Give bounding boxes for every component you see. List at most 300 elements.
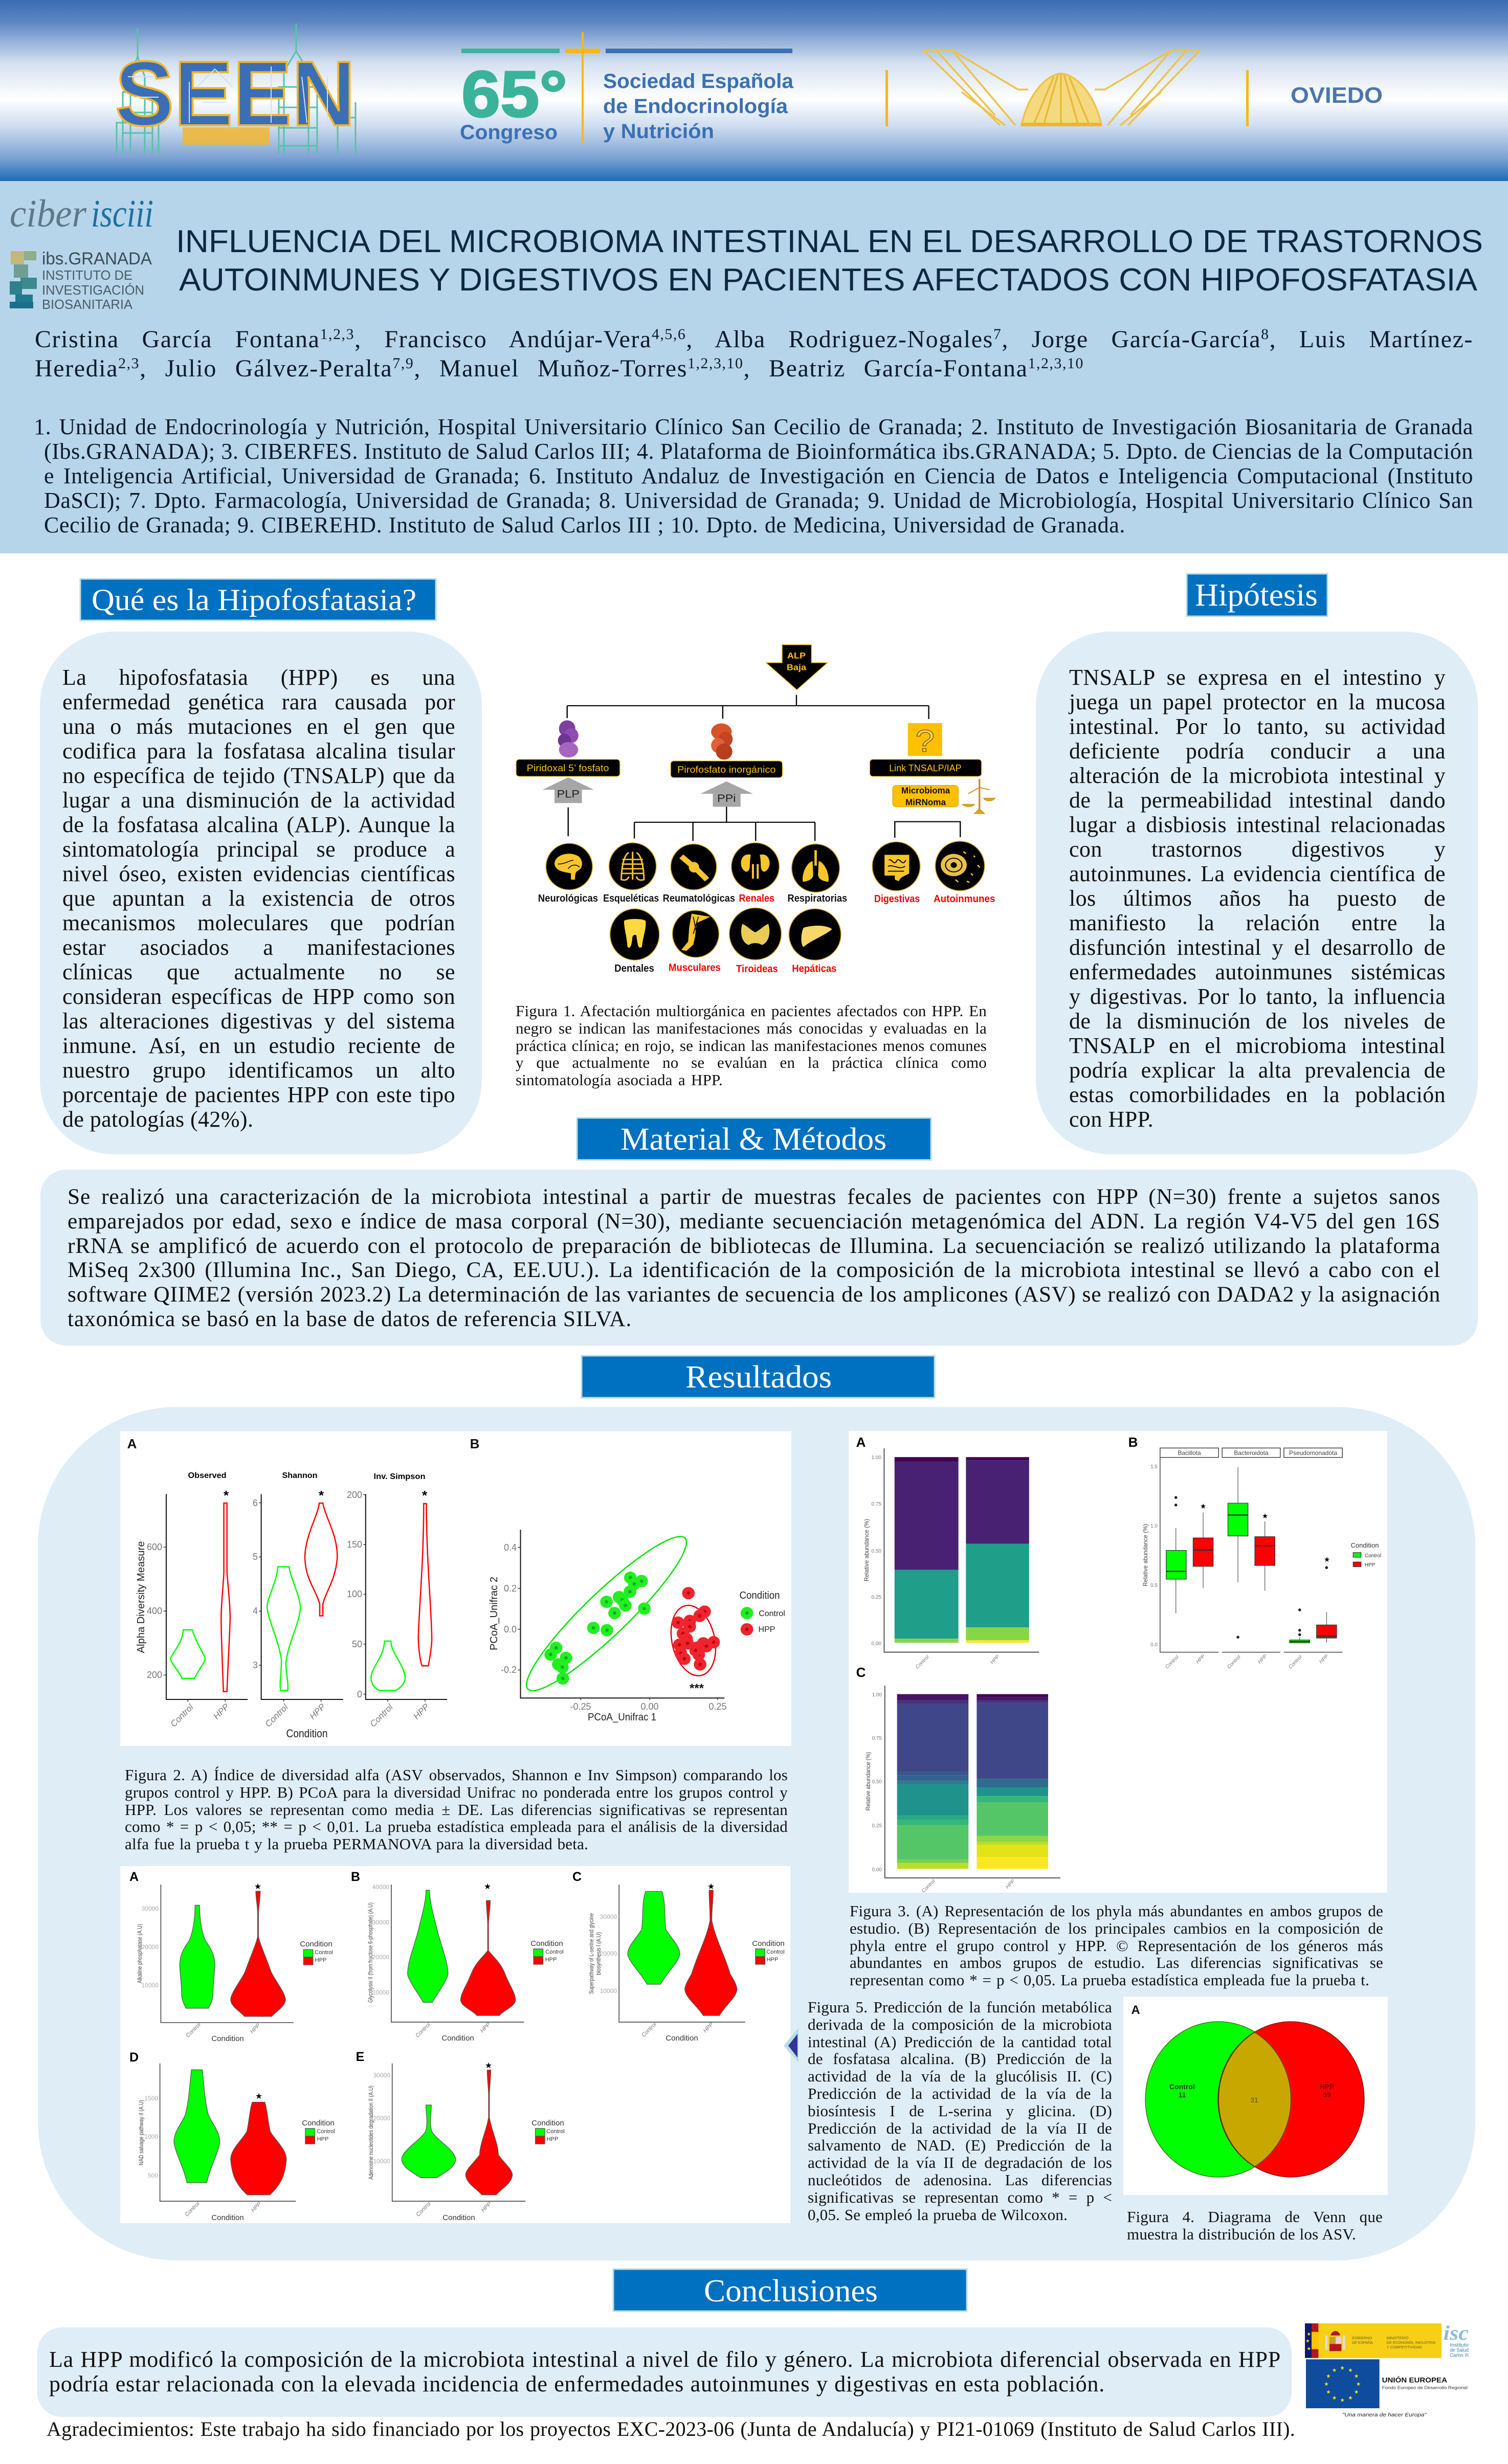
- caption: figure 5: actividad de la vía de la glucólisis II. (C): [808, 2067, 1112, 2085]
- caption: figure 5: biosíntesis I de L-serina y glicina. (D): [808, 2102, 1112, 2120]
- chart: phyla boxplots: Control: [1365, 1553, 1381, 1559]
- significance stars: [254, 1883, 715, 2101]
- panel letters: E: [356, 2050, 364, 2064]
- chart: PCoA scatter: Condition: [740, 1590, 780, 1601]
- x tick labels: Control: [185, 2022, 202, 2039]
- text: Qué es la Hipofosfatasia: nivel óseo, existen evidencias científicas: [62, 861, 455, 886]
- text: Hipótesis: manifiesto la relación entre la: [1069, 910, 1446, 935]
- affiliations: (Ibs.GRANADA); 3. CIBERFES. Instituto de Salud Carlos III; 4. Plataforma de Bioinformática ibs.GRANADA; 5. Dpto. de Ciencias de la Computación: [44, 439, 1473, 464]
- text: Conclusiones: La HPP modificó la composición de la microbiota intestinal a nivel de filo y género. La microbiota diferencial observada en HPP: [49, 2347, 1281, 2372]
- chart: phyla stacked bars: [856, 1435, 1039, 1670]
- panel letters: C: [572, 1870, 582, 1884]
- chart: genera stacked bars: Relative abundance (%): [864, 1752, 872, 1810]
- label: Microbioma MiRNoma: Microbioma: [901, 785, 950, 795]
- figure 4: Venn diagram: [1123, 1997, 1388, 2195]
- caption: figure 4: Figura 4. Diagrama de Venn que: [1127, 2208, 1383, 2226]
- chart: violins alpha diversity: 100: [347, 1589, 362, 1599]
- chart: phyla boxplots: 1.5: [1150, 1464, 1158, 1470]
- chart: violins alpha diversity: Shannon: [282, 1471, 317, 1480]
- x tick labels: HPP: [702, 2021, 715, 2034]
- text: Hipótesis: estas comorbilidades en la población: [1069, 1082, 1446, 1107]
- text: Hipótesis: enfermedades autoinmunes sistémicas: [1069, 959, 1446, 984]
- text: Qué es la Hipofosfatasia: [62, 665, 455, 1132]
- axis tick labels: 1500: [144, 2095, 158, 2102]
- chart: violins alpha diversity: 200: [347, 1490, 362, 1500]
- text: Hipótesis: lugar a disbiosis intestinal relacionadas: [1069, 812, 1446, 837]
- logo: ibs.GRANADA: INVESTIGACIÓN: [42, 282, 144, 298]
- arrow: ALP baja: ALP: [787, 651, 806, 660]
- text: Qué es la Hipofosfatasia: que apuntan a la existencia de otros: [62, 886, 455, 911]
- organ labels: Hepáticas: [792, 963, 836, 974]
- x axis titles: Condition: [211, 2213, 244, 2222]
- logo: Gobierno de España: ★: [1306, 2332, 1311, 2337]
- text: Hipótesis: de la permeabilidad intestinal dando: [1069, 788, 1446, 813]
- legends: Control: [317, 2129, 335, 2135]
- legends: HPP: [767, 1957, 778, 1963]
- text: Material y Métodos: MiSeq 2x300 (Illumina Inc., San Diego, CA, EE.UU.). La identificación de la composición de la microbiota intestinal se llevó a cabo con el: [68, 1258, 1440, 1282]
- axis tick labels: 20000: [600, 1950, 617, 1957]
- text: Hipótesis: y digestivas. Por lo tanto, la influencia: [1069, 984, 1446, 1009]
- legends: [300, 1939, 785, 2142]
- axis tick labels: 30000: [142, 1905, 159, 1912]
- chart: phyla boxplots: Relative abundance (%): [1142, 1524, 1149, 1586]
- logo: Unión Europea: ★: [1348, 2395, 1353, 2401]
- logo: Gobierno de España: DE ESPAÑA: [1352, 2340, 1373, 2345]
- x tick labels: Control: [640, 2021, 658, 2039]
- chart: phyla boxplots: HPP: [1318, 1653, 1330, 1665]
- panel letters: A: [129, 1870, 139, 1884]
- arrow: pointing to figure 5: [784, 2028, 799, 2063]
- text: Hipótesis: alteración de la microbiota intestinal y: [1069, 763, 1446, 788]
- logo: Unión Europea: ★: [1326, 2389, 1331, 2395]
- logo: Gobierno de España: ★: [1305, 2338, 1310, 2343]
- arrow: PLP: [542, 777, 594, 803]
- heading: Resultados: [582, 1356, 935, 1398]
- chart: violins alpha diversity: 4: [253, 1606, 258, 1616]
- legends: HPP: [545, 1957, 557, 1963]
- caption: figure 5: actividad de la vía II de degradación de los: [808, 2154, 1112, 2171]
- caption: figure 3: estudio. (B) Representación de los principales cambios en la composición de: [850, 1919, 1383, 1937]
- molecule: piridoxal: [558, 720, 579, 757]
- affiliations: Cecilio de Granada; 9. CIBEREHD. Instituto de Salud Carlos III ; 10. Dpto. de Medicina, Universidad de Granada.: [44, 512, 1125, 537]
- figure 4: Venn diagram: A: [1131, 2003, 1140, 2017]
- chart: phyla stacked bars: Control: [915, 1654, 930, 1670]
- chart: phyla stacked bars: 0.50: [872, 1549, 881, 1554]
- heading: Hipótesis: [1187, 574, 1327, 616]
- y axis titles: biosynthesis I (A.U): [595, 1932, 602, 1975]
- text: Material y Métodos: [68, 1184, 1440, 1331]
- significance stars: ★: [254, 1883, 261, 1891]
- panel: Resultados: [38, 1407, 1475, 2260]
- caption: figure 5: derivada de la composición de la microbiota: [808, 2015, 1112, 2033]
- heading: Qué es la Hipofosfatasia: Qué es la Hipofosfatasia?: [92, 583, 416, 617]
- legends: HPP: [547, 2136, 558, 2142]
- label: Link: Link TNSALP/IAP: [889, 763, 962, 774]
- logo: 65 congreso SEEN: Sociedad Española: [603, 70, 794, 93]
- caption: figure 2: alfa fue la prueba t y la prueba PERMANOVA para la diversidad beta.: [125, 1835, 588, 1853]
- caption: figure 2: [125, 1766, 788, 1853]
- x tick labels: HPP: [480, 2201, 493, 2213]
- chart: genera stacked bars: 0.25: [872, 1823, 882, 1829]
- logo: Unión Europea: UNIÓN EUROPEA: [1382, 2375, 1447, 2384]
- chart: violins alpha diversity: A: [127, 1436, 137, 1451]
- axis tick labels: 500: [148, 2172, 158, 2179]
- chart: genera stacked bars: 0.50: [872, 1779, 882, 1785]
- logo: Instituto de Salud Carlos III: Instituto: [1450, 2342, 1469, 2348]
- text: Material y Métodos: Se realizó una caracterización de la microbiota intestinal a partir de muestras fecales de pacientes con HPP (N=30) frente a sujetos sanos: [68, 1184, 1440, 1209]
- logo: Unión Europea: ★: [1354, 2373, 1359, 2379]
- legends: Control: [545, 1949, 564, 1955]
- x axis titles: [211, 2034, 698, 2222]
- title: AUTOINMUNES Y DIGESTIVOS EN PACIENTES AFECTADOS CON HIPOFOSFATASIA: [179, 262, 1478, 298]
- axis tick labels: 20000: [372, 1954, 389, 1961]
- chart: phyla boxplots: Control: [1226, 1654, 1242, 1670]
- text: Hipótesis: de la disminución de los niveles de: [1069, 1009, 1446, 1034]
- affiliations: [34, 414, 1473, 537]
- chart: phyla boxplots: HPP: [1257, 1653, 1269, 1665]
- label: Microbioma MiRNoma: [893, 785, 958, 807]
- chart: phyla boxplots: 1.0: [1150, 1524, 1158, 1529]
- arrow: PPi: [700, 781, 753, 807]
- logo: 65 congreso SEEN: Congreso: [460, 121, 558, 144]
- molecule: pirofosfato: [711, 724, 733, 759]
- arrow: ALP baja: [766, 645, 828, 690]
- affiliations: 1. Unidad de Endocrinología y Nutrición, Hospital Universitario Clínico San Cecilio de Granada; 2. Instituto de Investigación Biosanitaria de Granada: [34, 414, 1473, 439]
- caption: figure 1: sintomatología asociada a HPP.: [516, 1071, 723, 1089]
- logo: Gobierno de España: GOBIERNO: [1352, 2336, 1372, 2340]
- caption: figure 1: práctica clínica; en rojo, se indican las manifestaciones menos comunes: [516, 1037, 987, 1055]
- text: Material y Métodos: taxonómica se basó en la base de datos de referencia SILVA.: [68, 1307, 632, 1331]
- chart: phyla boxplots: [1128, 1435, 1381, 1670]
- chart: PCoA scatter: PCoA_Unifrac 1: [588, 1712, 656, 1723]
- chart: PCoA scatter: [470, 1436, 785, 1723]
- logo: Instituto de Salud Carlos III: [1444, 2321, 1469, 2359]
- text: Hipótesis: intestinal. Por lo tanto, su actividad: [1069, 714, 1446, 739]
- legends: Condition: [530, 1939, 563, 1948]
- organ labels: Neurológicas: [538, 893, 598, 904]
- text: Qué es la Hipofosfatasia: porcentaje de pacientes HPP con este tipo: [62, 1082, 455, 1107]
- icon: question mark: [908, 723, 942, 758]
- logo: Instituto de Salud Carlos III: Carlos III: [1450, 2353, 1469, 2359]
- chart: PCoA scatter: -0.2: [501, 1665, 517, 1675]
- text: Qué es la Hipofosfatasia: una o más mutaciones en el gen que: [62, 714, 455, 739]
- chart: violins alpha diversity: HPP: [412, 1701, 431, 1721]
- figure 4: Venn diagram: Control: [1169, 2082, 1195, 2091]
- y axis titles: Glycolysis II (from fructose 6-phosphate) (A.U): [367, 1902, 374, 2003]
- axis tick labels: 10000: [600, 1987, 617, 1995]
- chart: genera stacked bars: C: [856, 1665, 866, 1680]
- organ labels: Digestivas: [874, 893, 920, 905]
- chart: violins alpha diversity: Condition: [286, 1727, 327, 1740]
- chart: phyla stacked bars: 0.00: [872, 1641, 881, 1647]
- text: Material y Métodos: emparejados por edad, sexo e índice de masa corporal (N=30), mediante secuenciación metagenómica del ADN. La región V4-V5 del gen 16S: [68, 1209, 1440, 1234]
- caption: figure 2: grupos control y HPP. B) PCoA para la diversidad Unifrac no ponderada entre los grupos control y: [125, 1783, 788, 1801]
- text: Qué es la Hipofosfatasia: enfermedad genética rara causada por: [62, 689, 455, 714]
- organ labels: Respiratorias: [788, 893, 847, 904]
- chart: PCoA scatter: B: [470, 1436, 479, 1451]
- chart: violins alpha diversity: [127, 1436, 447, 1740]
- figure 2: alpha and beta diversity: [120, 1431, 791, 1746]
- heading: Conclusiones: Conclusiones: [704, 2274, 878, 2309]
- x tick labels: HPP: [250, 2201, 263, 2213]
- text: Qué es la Hipofosfatasia: estar asociados a manifestaciones: [62, 935, 455, 960]
- text: Qué es la Hipofosfatasia: clínicas que actualmente no se: [62, 959, 455, 984]
- panel: Qué es la Hipofosfatasia: [40, 632, 482, 1154]
- title: INFLUENCIA DEL MICROBIOMA INTESTINAL EN EL DESARROLLO DE TRASTORNOS: [176, 224, 1483, 259]
- chart: violins alpha diversity: Inv. Simpson: [373, 1472, 426, 1481]
- caption: figure 5: significativas se representan como * = p <: [808, 2188, 1112, 2206]
- text: Hipótesis: TNSALP se expresa en el intestino y: [1069, 665, 1446, 690]
- label: Pirofosfato: [671, 761, 783, 778]
- chart: violins alpha diversity: 400: [147, 1606, 162, 1616]
- caption: figure 5: Predicción de la actividad de la vía de la: [808, 2085, 1112, 2102]
- figure 4: Venn diagram: 31: [1250, 2096, 1258, 2104]
- organ labels: Reumatológicas: [663, 893, 735, 904]
- chart: phyla boxplots: Condition: [1351, 1541, 1379, 1549]
- chart: violins alpha diversity: Control: [368, 1702, 395, 1729]
- caption: figure 4: muestra la distribución de los ASV.: [1127, 2225, 1356, 2243]
- logo: 65 congreso SEEN: y Nutrición: [603, 120, 714, 143]
- axis tick labels: 10000: [142, 1982, 159, 1989]
- organ labels: Autoinmunes: [934, 893, 995, 905]
- chart: phyla boxplots: ★: [1200, 1502, 1206, 1510]
- caption: figure 3: [850, 1902, 1383, 1989]
- figure 4: Venn diagram: 39: [1323, 2091, 1331, 2099]
- significance stars: ★: [485, 2062, 492, 2070]
- violin shapes and axes: [160, 1885, 765, 2201]
- y axis titles: NAD salvage pathway II (A.U): [138, 2100, 145, 2165]
- caption: figure 5: nucleótidos de adenosina. Las diferencias: [808, 2171, 1112, 2189]
- y axis titles: Alkaline phosphatase (A.U): [136, 1924, 143, 1983]
- significance stars: ★: [707, 1883, 715, 1891]
- logo: Unión Europea: "Una manera de hacer Europa": [1342, 2412, 1427, 2418]
- caption: figure 2: como * = p < 0,05; ** = p < 0,01. La prueba estadística empleada para el análisis de la diversidad: [125, 1818, 788, 1835]
- chart: PCoA scatter: Control: [759, 1609, 785, 1618]
- figure 4: Venn diagram: HPP: [1320, 2082, 1334, 2091]
- axis tick labels: 30000: [600, 1913, 617, 1920]
- chart: phyla boxplots: HPP: [1365, 1562, 1376, 1568]
- caption: figure 5: salvamento de NAD. (E) Predicción de la: [808, 2136, 1112, 2154]
- chart: violins alpha diversity: 3: [253, 1660, 258, 1670]
- text: Hipótesis: disfunción intestinal y el desarrollo de: [1069, 935, 1446, 960]
- chart: phyla boxplots: Control: [1288, 1654, 1303, 1670]
- axis tick labels: 30000: [373, 2072, 390, 2079]
- chart: phyla boxplots: 0.0: [1150, 1642, 1158, 1648]
- arrow: ALP baja: Baja: [787, 662, 806, 672]
- logo: Unión Europea: ★: [1356, 2381, 1361, 2387]
- caption: figure 5: de fosfatasa alcalina. (B) Predicción de la: [808, 2050, 1112, 2068]
- chart: phyla stacked bars: Relative abundance (%): [863, 1519, 870, 1581]
- logo: Gobierno de España: Y COMPETITIVIDAD: [1387, 2345, 1422, 2349]
- text: Qué es la Hipofosfatasia: lugar a una disminución de la actividad: [62, 788, 455, 813]
- heading: Resultados: Resultados: [685, 1360, 832, 1395]
- axis tick labels: 30000: [372, 1919, 389, 1926]
- text: Hipótesis: podría explicar la alta prevalencia de: [1069, 1058, 1446, 1083]
- chart: PCoA scatter: PCoA_Unifrac 2: [489, 1577, 500, 1650]
- text: Qué es la Hipofosfatasia: consideran específicas de HPP como son: [62, 984, 455, 1009]
- caption: figure 5: intestinal (A) Predicción de la cantidad total: [808, 2033, 1112, 2051]
- organ: Neurológicas: [546, 843, 592, 890]
- text: Hipótesis: con trastornos digestivos y: [1069, 837, 1446, 862]
- x tick labels: Control: [414, 2022, 432, 2039]
- text: Material y Métodos: software QIIME2 (versión 2023.2) La determinación de las variantes de secuencia de los amplicones (ASV) se realizó con DADA2 y la asignación: [68, 1282, 1440, 1307]
- legends: Control: [315, 1950, 333, 1956]
- chart: phyla boxplots: Bacillota: [1178, 1449, 1201, 1457]
- authors: Cristina García Fontana1,2,3, Francisco Andújar-Vera4,5,6, Alba Rodriguez-Nogales7, Jorge García-García8, Luis Martínez-: [35, 326, 1473, 353]
- x axis titles: Condition: [442, 2213, 475, 2222]
- icon: question mark: ?: [916, 724, 935, 758]
- chart: phyla stacked bars: HPP: [989, 1654, 1001, 1666]
- panel letters: B: [351, 1870, 360, 1884]
- text: Hipótesis: autoinmunes. La evidencia científica de: [1069, 861, 1446, 886]
- axis tick labels: 10000: [373, 2158, 390, 2165]
- x axis titles: Condition: [441, 2034, 474, 2043]
- chart: genera stacked bars: [856, 1665, 1060, 1894]
- text: Conclusiones: podría estar relacionada con la elevada incidencia de enfermedades autoinmunes y digestivas en esta población.: [49, 2371, 1105, 2396]
- chart: violins alpha diversity: Control: [263, 1702, 291, 1729]
- text: Qué es la Hipofosfatasia: de patologías (42%).: [62, 1107, 253, 1132]
- heading: Hipótesis: Hipótesis: [1195, 578, 1318, 613]
- text: Qué es la Hipofosfatasia: mecanismos moleculares que podrían: [62, 910, 455, 935]
- caption: figure 2: Figura 2. A) Índice de diversidad alfa (ASV observados, Shannon e Inv Simpson) comparando los: [125, 1766, 788, 1784]
- axis tick labels: 40000: [372, 1884, 389, 1891]
- chart: phyla boxplots: Bacteroidota: [1234, 1449, 1269, 1457]
- caption: figure 3: representan como * = p < 0,05. La prueba estadística empleada fue la prueba t.: [850, 1971, 1369, 1989]
- arrow: PLP: PLP: [557, 788, 580, 800]
- figure 5: metabolic function violins: [120, 1866, 790, 2223]
- text: Hipótesis: [1068, 665, 1446, 1132]
- logo: Unión Europea: ★: [1324, 2381, 1329, 2387]
- text: Qué es la Hipofosfatasia: de la fosfatasa alcalina (ALP). Aunque la: [62, 812, 455, 837]
- x tick labels: Control: [415, 2201, 432, 2218]
- logo: Unión Europea: ★: [1354, 2389, 1359, 2395]
- legends: Condition: [531, 2119, 564, 2127]
- chart: phyla stacked bars: A: [856, 1435, 866, 1450]
- chart: phyla boxplots: ★: [1324, 1555, 1330, 1563]
- axis tick labels: 20000: [142, 1943, 159, 1951]
- label: Microbioma MiRNoma: MiRNoma: [905, 797, 946, 807]
- caption: figure 1: negro se indican las manifestaciones más conocidas y evaluadas en la: [516, 1019, 987, 1037]
- legends: Condition: [752, 1939, 785, 1948]
- legends: Condition: [302, 2119, 335, 2127]
- chart: violins alpha diversity: 0: [357, 1689, 362, 1699]
- heading: Material & Métodos: [577, 1118, 931, 1160]
- chart: violins alpha diversity: Control: [169, 1702, 196, 1729]
- organ: Renales: [731, 843, 779, 890]
- x axis titles: Condition: [211, 2034, 244, 2043]
- caption: figure 5: Predicción de la actividad de la vía II de: [808, 2119, 1112, 2137]
- funding logos: [1305, 2321, 1469, 2418]
- logo: Unión Europea: [1306, 2359, 1468, 2418]
- heading: Material & Métodos: Material & Métodos: [620, 1122, 886, 1157]
- panel: Hipótesis: [1036, 632, 1478, 1154]
- organ: Digestivas: [872, 842, 920, 891]
- panel: Conclusiones: [37, 2327, 1292, 2417]
- text: Conclusiones: [49, 2347, 1281, 2396]
- chart: phyla boxplots: Pseudomonadota: [1289, 1449, 1337, 1457]
- text: Material y Métodos: rRNA se amplificó de acuerdo con el protocolo de preparación de bibliotecas de Illumina. La secuenciación se realizó utilizando la plataforma: [68, 1234, 1440, 1258]
- axis tick labels: 10000: [372, 1989, 389, 1996]
- title: [176, 224, 1483, 298]
- x tick labels: HPP: [479, 2021, 492, 2034]
- caption: figure 5: 0,05. Se empleó la prueba de Wilcoxon.: [808, 2206, 1068, 2224]
- chart: phyla stacked bars: 0.25: [872, 1595, 881, 1600]
- caption: figure 4: [1127, 2208, 1383, 2243]
- logo: Unión Europea: ★: [1332, 2367, 1337, 2373]
- logo: Gobierno de España: [1305, 2323, 1442, 2358]
- figure 3: taxonomic composition: [849, 1431, 1387, 1894]
- chart: violins alpha diversity: 5: [253, 1552, 258, 1562]
- title band: [0, 181, 1508, 553]
- x tick labels: [184, 2021, 715, 2218]
- x axis titles: Condition: [666, 2034, 698, 2043]
- icon: scales: [962, 779, 995, 814]
- logo: 65 congreso SEEN: de Endocrinología: [603, 95, 788, 118]
- legends: Control: [546, 2129, 565, 2135]
- logo: Unión Europea: ★: [1326, 2373, 1331, 2379]
- caption: figure 5: [808, 1999, 1112, 2223]
- chart: PCoA scatter: -0.25: [570, 1701, 591, 1712]
- caption: figure 5: Figura 5. Predicción de la función metabólica: [808, 1998, 1112, 2016]
- text: Qué es la Hipofosfatasia: las alteraciones digestivas y del sistema: [62, 1009, 455, 1034]
- text: Hipótesis: deficiente podría conducir a una: [1069, 738, 1446, 764]
- logo: Instituto de Salud Carlos III: de Salud: [1450, 2347, 1469, 2353]
- chart: genera stacked bars: 1.00: [872, 1692, 882, 1698]
- chart: violins alpha diversity: 200: [147, 1670, 162, 1680]
- organ: Musculares: [672, 910, 719, 957]
- text: Hipótesis: con HPP.: [1069, 1107, 1154, 1132]
- text: Hipótesis: TNSALP en el microbioma intestinal: [1069, 1033, 1446, 1058]
- logo: ibs.GRANADA: INSTITUTO DE: [42, 267, 132, 283]
- text: Hipótesis: juega un papel protector en la mucosa: [1069, 689, 1446, 714]
- chart: PCoA scatter: 0.00: [640, 1701, 659, 1712]
- icon: gold architecture arch: [885, 50, 1249, 126]
- logo: Unión Europea: ★: [1332, 2395, 1337, 2401]
- organ: Autoinmunes: [935, 841, 985, 891]
- heading: Conclusiones: [613, 2269, 967, 2311]
- caption: figure 3: phyla entre el grupo control y HPP. © Representación de los géneros más: [850, 1937, 1383, 1955]
- logo: Gobierno de España: MINISTERIO: [1387, 2336, 1409, 2340]
- y axis titles: Adenosine nucleotides degradation II (A.U): [367, 2086, 374, 2180]
- logo: ciber isciii: [10, 192, 153, 235]
- logo: Gobierno de España: DE ECONOMÍA, INDUSTRIA: [1387, 2340, 1435, 2345]
- chart: phyla boxplots: B: [1128, 1435, 1138, 1450]
- panel letters: D: [129, 2050, 139, 2065]
- legends: Control: [766, 1949, 785, 1955]
- chart: violins alpha diversity: *: [422, 1488, 428, 1503]
- affiliations: e Inteligencia Artificial, Universidad de Granada; 6. Instituto Andaluz de Investigación en Ciencia de Datos e Inteligencia Computacional (Instituto: [44, 463, 1473, 488]
- label: Link: [870, 759, 982, 776]
- logo: 65 congreso SEEN: 65°: [461, 58, 567, 131]
- chart: violins alpha diversity: *: [224, 1488, 229, 1503]
- chart: genera stacked bars: 0.75: [872, 1736, 882, 1741]
- logo: Gobierno de España: ★: [1306, 2346, 1311, 2351]
- chart: genera stacked bars: 0.00: [872, 1867, 882, 1873]
- chart: PCoA scatter: 0.2: [504, 1583, 517, 1594]
- chart: PCoA scatter: 0.25: [708, 1701, 727, 1712]
- logo: Instituto de Salud Carlos III: isc: [1444, 2321, 1469, 2344]
- logo: Unión Europea: ★: [1348, 2367, 1353, 2373]
- organ: Esqueléticas: [609, 843, 656, 890]
- chart: genera stacked bars: Control: [921, 1878, 937, 1894]
- caption: figure 3: Figura 3. (A) Representación de los phyla más abundantes en ambos grupos de: [850, 1902, 1383, 1920]
- significance stars: ★: [255, 2092, 262, 2101]
- logo: ciber isciii: ciber: [10, 192, 86, 235]
- logo: ibs.GRANADA: ibs.GRANADA: [42, 249, 152, 268]
- logo: ibs.GRANADA: [10, 249, 152, 312]
- text: Agradecimientos: Agradecimientos: Este trabajo ha sido financiado por los proyectos EXC-2023-06 (Junta de Andalucía) y PI21-01069 (Instituto de Salud Carlos III).: [47, 2417, 1295, 2440]
- text: OVIEDO: OVIEDO: [1291, 83, 1383, 108]
